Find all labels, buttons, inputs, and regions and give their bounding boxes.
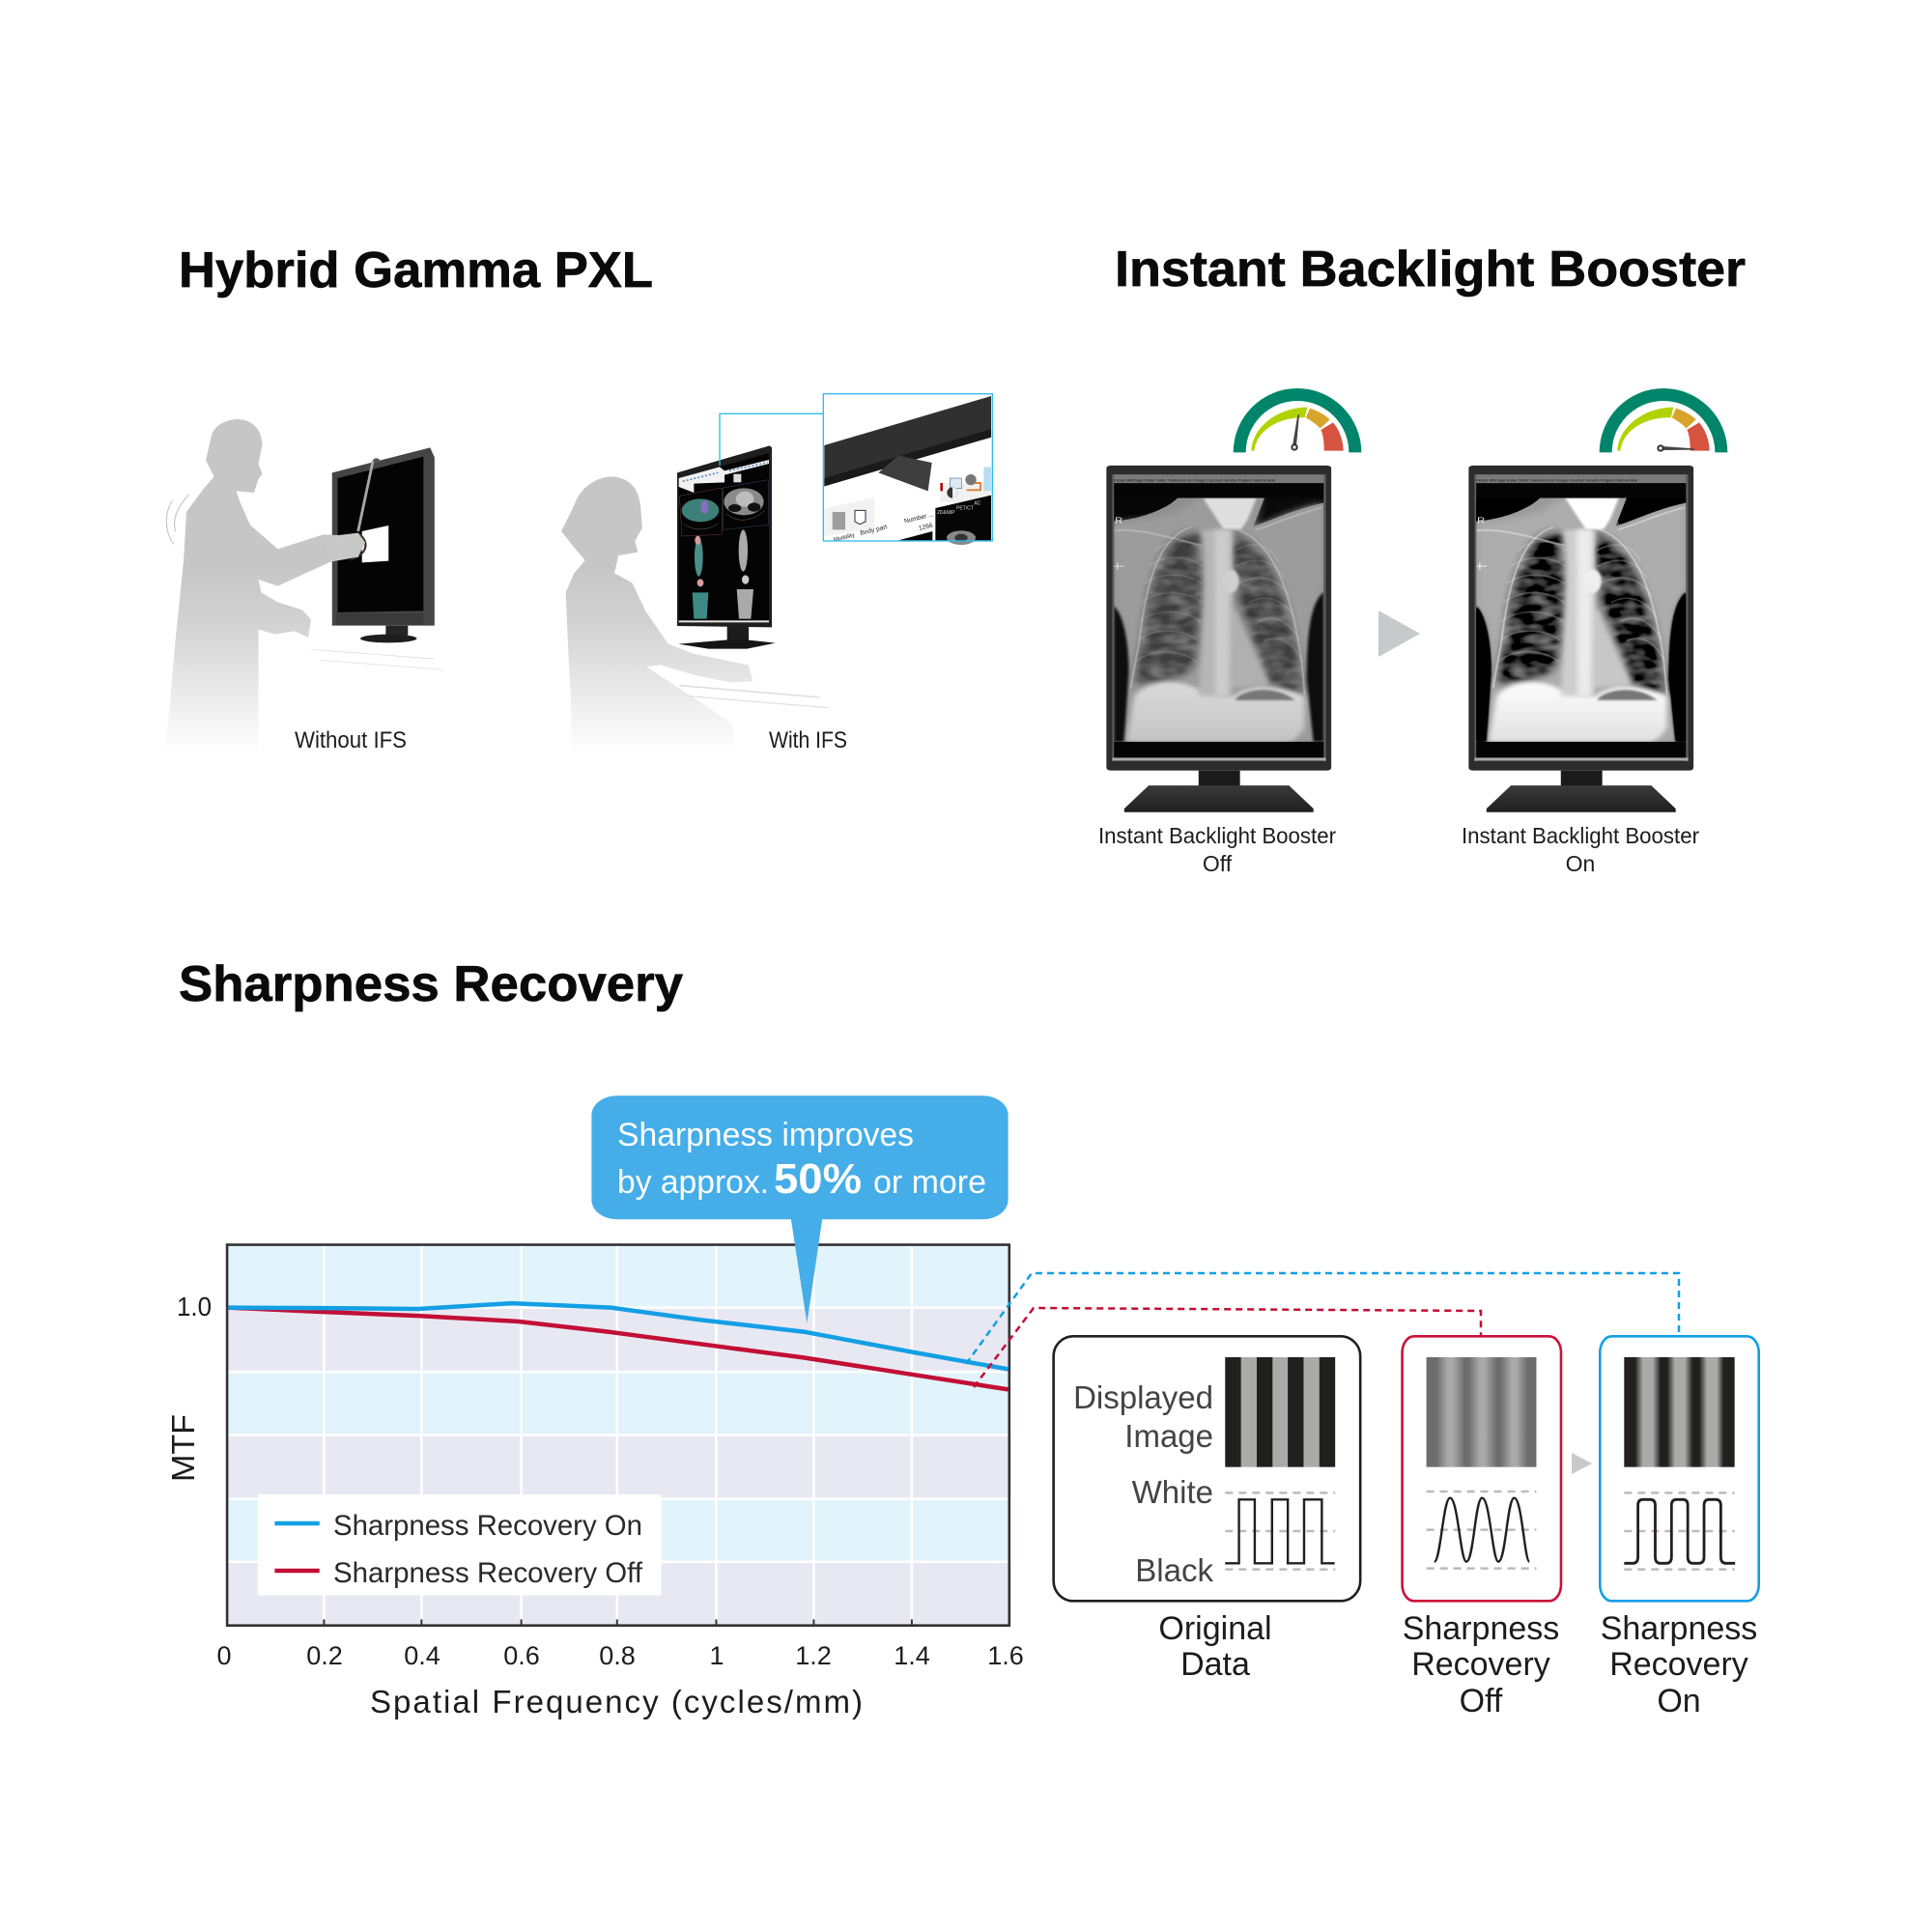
caption: sharpness recovery on bbox=[1601, 1610, 1757, 1719]
icon: standing man silhouette bbox=[164, 419, 366, 753]
label: R marker: R bbox=[1115, 516, 1122, 526]
caption: booster on: Instant Backlight Booster bbox=[1462, 823, 1699, 848]
icon: monitor with chest x-ray bbox=[1106, 466, 1331, 812]
caption: booster on bbox=[1462, 823, 1699, 876]
caption: booster off bbox=[1098, 823, 1336, 876]
soft wave bbox=[1427, 1492, 1536, 1569]
x axis title: Spatial Frequency (cycles/mm) bbox=[370, 1684, 863, 1719]
labels: original data row labels bbox=[1073, 1379, 1213, 1588]
x axis tick labels: 1.4 bbox=[894, 1641, 930, 1670]
legend bbox=[258, 1494, 662, 1595]
x axis tick labels: 1.2 bbox=[795, 1641, 832, 1670]
icon: zoomed sensor inset: Body part bbox=[860, 524, 888, 537]
icon: desk lines bbox=[679, 686, 827, 708]
x axis tick labels: 0.8 bbox=[599, 1641, 636, 1670]
x axis tick labels: 0.4 bbox=[404, 1641, 440, 1670]
labels: original data row labels: Image bbox=[1124, 1418, 1213, 1454]
caption: sharpness recovery off: Sharpness bbox=[1403, 1610, 1559, 1647]
panel: without IFS illustration bbox=[166, 419, 442, 730]
x axis tick labels: 0 bbox=[216, 1641, 232, 1670]
caption: original data bbox=[1158, 1610, 1272, 1683]
title: Sharpness Recovery: Sharpness Recovery bbox=[179, 956, 683, 1012]
icon: zoomed sensor inset: 1266 bbox=[918, 522, 934, 532]
sharpened stripes bbox=[1624, 1357, 1735, 1467]
panel: sharpness recovery off bbox=[1401, 1335, 1563, 1603]
callout text: or more bbox=[873, 1164, 986, 1201]
panel: backlight booster off monitor bbox=[1106, 466, 1331, 812]
caption: booster off: Instant Backlight Booster bbox=[1098, 823, 1336, 848]
icon: zoomed sensor inset: AC bbox=[974, 501, 981, 507]
caption: sharpness recovery off bbox=[1403, 1610, 1559, 1719]
icon: connector line bbox=[720, 413, 823, 466]
caption: booster on: On bbox=[1566, 851, 1595, 876]
label: R marker: R bbox=[1477, 516, 1485, 526]
legend swatch: on bbox=[274, 1521, 320, 1525]
icon: zoomed sensor inset: PET/CT bbox=[956, 505, 974, 511]
icon: zoomed sensor inset bbox=[823, 394, 992, 545]
displayed image stripes bbox=[1225, 1357, 1335, 1467]
x axis tick labels bbox=[216, 1641, 1024, 1670]
labels: original data row labels: White bbox=[1132, 1474, 1213, 1510]
legend labels: Sharpness Recovery On bbox=[333, 1510, 642, 1542]
recovered wave bbox=[1624, 1492, 1735, 1570]
icon: desk lines bbox=[311, 649, 442, 669]
panel: backlight booster on monitor bbox=[1468, 466, 1694, 812]
caption: original data: Original bbox=[1158, 1610, 1272, 1647]
line: sharpness recovery off bbox=[228, 1308, 1009, 1389]
chart: MTF line chart bbox=[226, 1095, 1010, 1627]
icon: zoomed sensor inset: Modality bbox=[833, 532, 855, 544]
callout text: by approx. bbox=[617, 1164, 769, 1201]
caption: Without IFS: Without IFS bbox=[295, 727, 407, 753]
y axis labels: MTF bbox=[165, 1414, 201, 1482]
icon: desk lines bbox=[680, 685, 828, 708]
caption: With IFS: With IFS bbox=[769, 727, 847, 753]
callout text bbox=[617, 1117, 986, 1203]
callout text: 50% bbox=[774, 1155, 862, 1203]
caption: sharpness recovery off: Off bbox=[1460, 1683, 1503, 1719]
title: Hybrid Gamma PXL: Hybrid Gamma PXL bbox=[179, 242, 653, 298]
x axis tick labels: 0.6 bbox=[503, 1641, 540, 1670]
icon: motion lines bbox=[166, 495, 189, 544]
caption: sharpness recovery on: Recovery bbox=[1609, 1646, 1748, 1683]
icon: seated woman silhouette bbox=[561, 476, 753, 753]
labels: original data row labels: Displayed bbox=[1073, 1379, 1213, 1415]
panel: original data bbox=[1052, 1335, 1362, 1603]
y axis labels: 1.0 bbox=[177, 1292, 212, 1321]
legend swatch: off bbox=[274, 1569, 320, 1573]
panel: sharpness recovery on bbox=[1599, 1335, 1760, 1603]
arrow: off to on small bbox=[1572, 1453, 1592, 1474]
dashed connector: blue bbox=[966, 1273, 1679, 1364]
square wave bbox=[1225, 1492, 1335, 1570]
x axis tick labels: 1.6 bbox=[987, 1641, 1024, 1670]
blurred stripes bbox=[1427, 1357, 1536, 1467]
icon: monitor with chest x-ray: Fichier Affichage Editer Outils Traitement de l'image Couches Fenêtre Plugins Options Aide bbox=[1114, 479, 1275, 483]
icon: gauge on bbox=[1600, 388, 1727, 452]
x axis tick labels: 0.2 bbox=[306, 1641, 343, 1670]
icon: zoomed sensor inset: Number ... bbox=[903, 511, 934, 526]
panel: IFS monitor and sensor inset bbox=[677, 393, 993, 708]
legend labels: Sharpness Recovery Off bbox=[333, 1557, 643, 1589]
caption: sharpness recovery on: On bbox=[1657, 1683, 1701, 1719]
title: Instant Backlight Booster: Instant Backlight Booster bbox=[1115, 242, 1746, 298]
icon: monitor with brightened chest x-ray bbox=[1468, 466, 1693, 812]
arrow: off to on bbox=[1378, 611, 1420, 657]
caption: sharpness recovery off: Recovery bbox=[1411, 1646, 1550, 1683]
icon: monitor with brightened chest x-ray: Fichier Affichage Editer Outils Traitement de l'image Couches Fenêtre Plugins Options Aide bbox=[1476, 479, 1637, 483]
icon: monitor with CT images bbox=[677, 445, 776, 649]
y axis labels bbox=[165, 1292, 212, 1482]
icon: zoomed sensor inset: 2D&MIP bbox=[937, 510, 955, 516]
labels: original data row labels: Black bbox=[1135, 1552, 1213, 1588]
icon: monitor with raised sensor bbox=[324, 447, 435, 642]
x axis tick labels: 1 bbox=[709, 1641, 724, 1670]
caption: original data: Data bbox=[1180, 1646, 1250, 1683]
caption: sharpness recovery on: Sharpness bbox=[1601, 1610, 1757, 1647]
line: sharpness recovery on bbox=[228, 1303, 1009, 1369]
callout text: Sharpness improves bbox=[617, 1117, 914, 1153]
panel: with IFS woman silhouette bbox=[561, 476, 824, 730]
dashed connector: red bbox=[974, 1308, 1481, 1387]
caption: booster off: Off bbox=[1203, 851, 1233, 876]
callout bubble bbox=[591, 1095, 1009, 1323]
legend labels bbox=[333, 1510, 643, 1589]
icon: gauge off bbox=[1233, 388, 1362, 452]
